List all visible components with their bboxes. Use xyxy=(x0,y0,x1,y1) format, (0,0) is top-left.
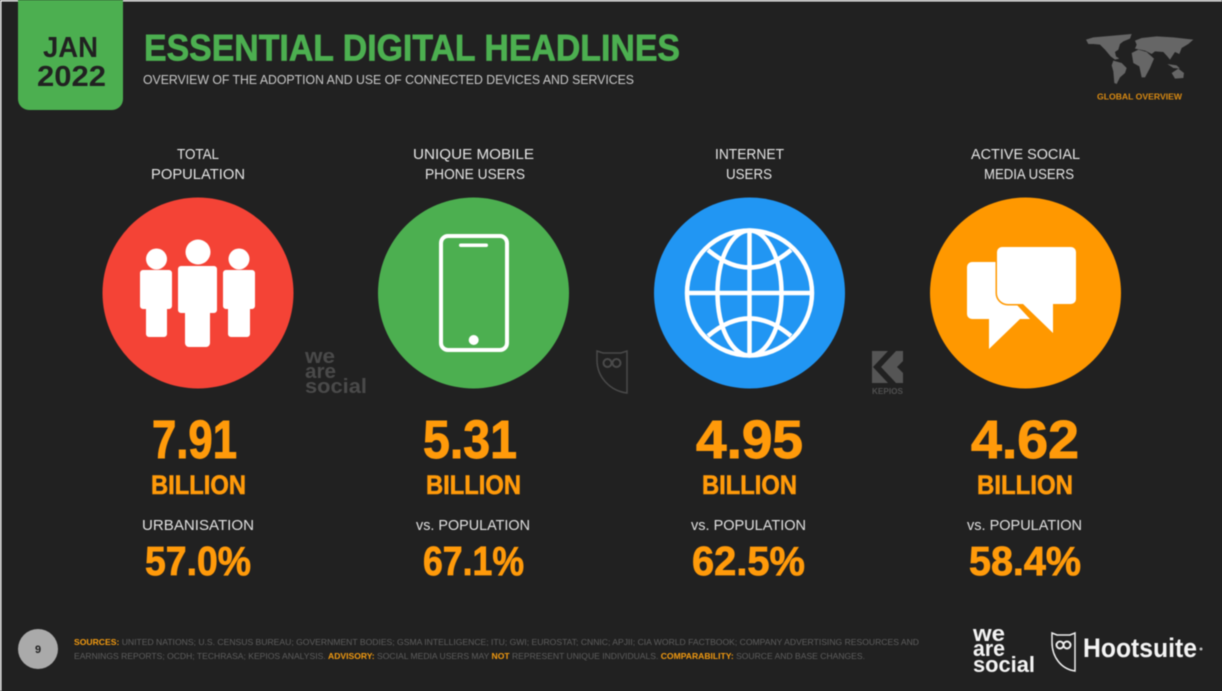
panel: unique mobile phone users xyxy=(378,146,569,584)
global overview badge: GLOBAL OVERVIEW xyxy=(1097,92,1182,102)
heading: TOTAL xyxy=(177,146,219,163)
watermark: we are social: social xyxy=(305,376,367,398)
watermark: we are social xyxy=(304,346,367,398)
global overview badge xyxy=(1086,34,1193,101)
heading xyxy=(971,146,1080,183)
heading: USERS xyxy=(726,166,772,183)
panel: active social media users xyxy=(930,146,1121,584)
icon: speech bubbles in orange circle xyxy=(930,198,1121,388)
heading: PHONE USERS xyxy=(425,166,525,183)
heading: POPULATION xyxy=(151,166,245,183)
unit: BILLION xyxy=(426,470,521,500)
logo: we are social: social xyxy=(973,652,1035,677)
unit: BILLION xyxy=(151,470,246,500)
watermark: kepios: KEPIOS xyxy=(872,387,904,396)
value: 5.31 xyxy=(423,410,517,470)
sub label: vs. POPULATION xyxy=(967,517,1082,534)
panel: internet users xyxy=(654,146,845,584)
heading xyxy=(715,146,784,183)
footer page number: 9 xyxy=(35,644,41,656)
watermark: we are social: we xyxy=(304,346,335,368)
percentage: 67.1% xyxy=(423,538,524,584)
sub label: URBANISATION xyxy=(142,517,254,534)
subtitle: OVERVIEW OF THE ADOPTION AND USE OF CONNECTED DEVICES AND SERVICES xyxy=(143,73,634,87)
heading: INTERNET xyxy=(715,146,784,163)
unit: BILLION xyxy=(977,470,1073,500)
percentage: 58.4% xyxy=(969,538,1081,584)
sub label: vs. POPULATION xyxy=(691,517,806,534)
icon: world map xyxy=(1086,34,1193,84)
heading: MEDIA USERS xyxy=(984,166,1074,183)
logo: hootsuite xyxy=(1052,633,1202,671)
percentage: 57.0% xyxy=(145,538,251,584)
logo: we are social xyxy=(972,621,1035,677)
footer page number xyxy=(18,629,58,669)
title: ESSENTIAL DIGITAL HEADLINES xyxy=(144,28,680,68)
value: 4.95 xyxy=(696,410,803,470)
footer sources: EARNINGS REPORTS; OCDH; TECHRASA; KEPIOS ANALYSIS. ADVISORY: SOCIAL MEDIA USERS MAY NOT REPRESENT UNIQUE INDIVIDUALS. COMPARABILITY: SOURCE AND BASE CHANGES. xyxy=(74,651,865,661)
percentage: 62.5% xyxy=(692,538,805,584)
logo: we are social: we xyxy=(972,621,1005,646)
date tab: 2022 xyxy=(37,61,106,93)
logo: we are social: are xyxy=(973,636,1005,661)
footer sources: SOURCES: UNITED NATIONS; U.S. CENSUS BUREAU; GOVERNMENT BODIES; GSMA INTELLIGENCE; ITU; GWI; EUROSTAT; CNNIC; APJII; CIA WORLD FACTBOOK; COMPANY ADVERTISING RESOURCES AND xyxy=(74,637,919,647)
unit: BILLION xyxy=(702,470,797,500)
heading: UNIQUE MOBILE xyxy=(413,146,534,163)
logo: hootsuite: Hootsuite xyxy=(1083,633,1197,663)
icon: people in red circle xyxy=(102,198,294,388)
icon: owl xyxy=(1052,633,1075,671)
date tab xyxy=(18,0,123,110)
icon: phone in green circle xyxy=(378,198,569,388)
watermark: we are social: are xyxy=(305,361,336,383)
value: 7.91 xyxy=(152,410,237,470)
heading xyxy=(151,146,245,183)
heading: ACTIVE SOCIAL xyxy=(971,146,1080,163)
sub label: vs. POPULATION xyxy=(416,517,530,534)
watermark: kepios xyxy=(872,351,904,396)
watermark: owl xyxy=(597,351,627,393)
date tab: JAN xyxy=(43,32,98,64)
heading xyxy=(413,146,534,183)
panel: total population xyxy=(102,146,294,584)
footer sources xyxy=(74,637,919,661)
value: 4.62 xyxy=(971,410,1079,470)
icon: globe in blue circle xyxy=(654,198,845,388)
